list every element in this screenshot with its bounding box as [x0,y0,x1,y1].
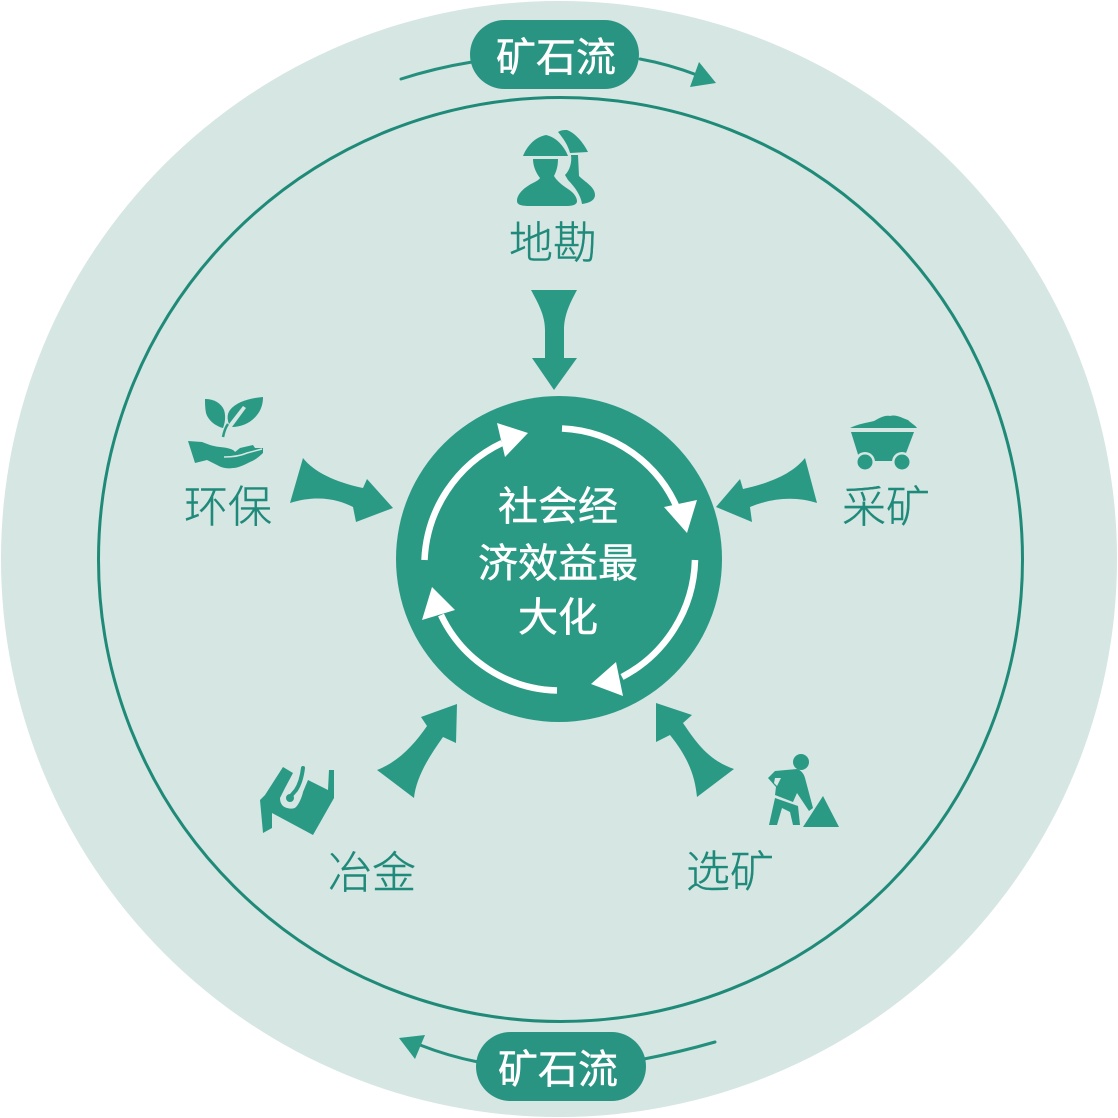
node: metallurgy [260,704,457,898]
cycle arrow upper right [562,428,697,533]
centre circle [396,396,722,722]
arrow: environment to centre [290,458,393,522]
icon: ladle [260,767,334,835]
centre line 1: 社会经 [498,485,618,529]
label: beneficiation: 选矿 [686,848,774,897]
arrow: mining to centre [716,458,817,522]
cycle arrow lower right [591,560,695,696]
label: mining: 采矿 [842,483,930,532]
top pill [470,20,639,89]
bottom pill text: 矿石流 [498,1048,618,1092]
icon: mine cart [850,415,917,472]
node: environment [184,397,393,532]
arrow: survey to centre [531,290,577,390]
inner ring [98,98,1022,1022]
node: mining [716,415,930,532]
centre text [478,485,638,640]
arrow: beneficiation to centre [656,703,734,797]
centre disc [396,396,722,722]
bottom flow line [420,1042,715,1062]
cycle arrow lower left [422,587,557,690]
label: metallurgy: 冶金 [328,849,416,898]
bottom flow arrowhead [399,1035,425,1059]
ore pile [803,796,839,827]
label: environment: 环保 [184,483,272,532]
node: beneficiation [656,703,839,897]
icon: worker with shovel [768,754,839,827]
worker torso [768,769,813,811]
icon: plant in hand [188,397,263,468]
icon: workers [517,130,595,206]
bottom ore flow [399,1032,715,1101]
cycle arrow upper left [424,423,528,560]
label: survey: 地勘 [509,219,597,268]
worker head [793,754,809,770]
centre line 3: 大化 [518,596,598,640]
top pill text: 矿石流 [496,36,616,80]
bottom pill [476,1032,646,1101]
top ore flow [401,20,716,89]
arrow: metallurgy to centre [377,704,457,798]
cycle arrows [422,423,697,696]
top flow arrowhead [690,62,716,87]
centre line 2: 济效益最 [478,542,638,586]
node: survey [509,130,597,390]
top flow line [401,59,697,79]
worker legs [769,798,800,825]
